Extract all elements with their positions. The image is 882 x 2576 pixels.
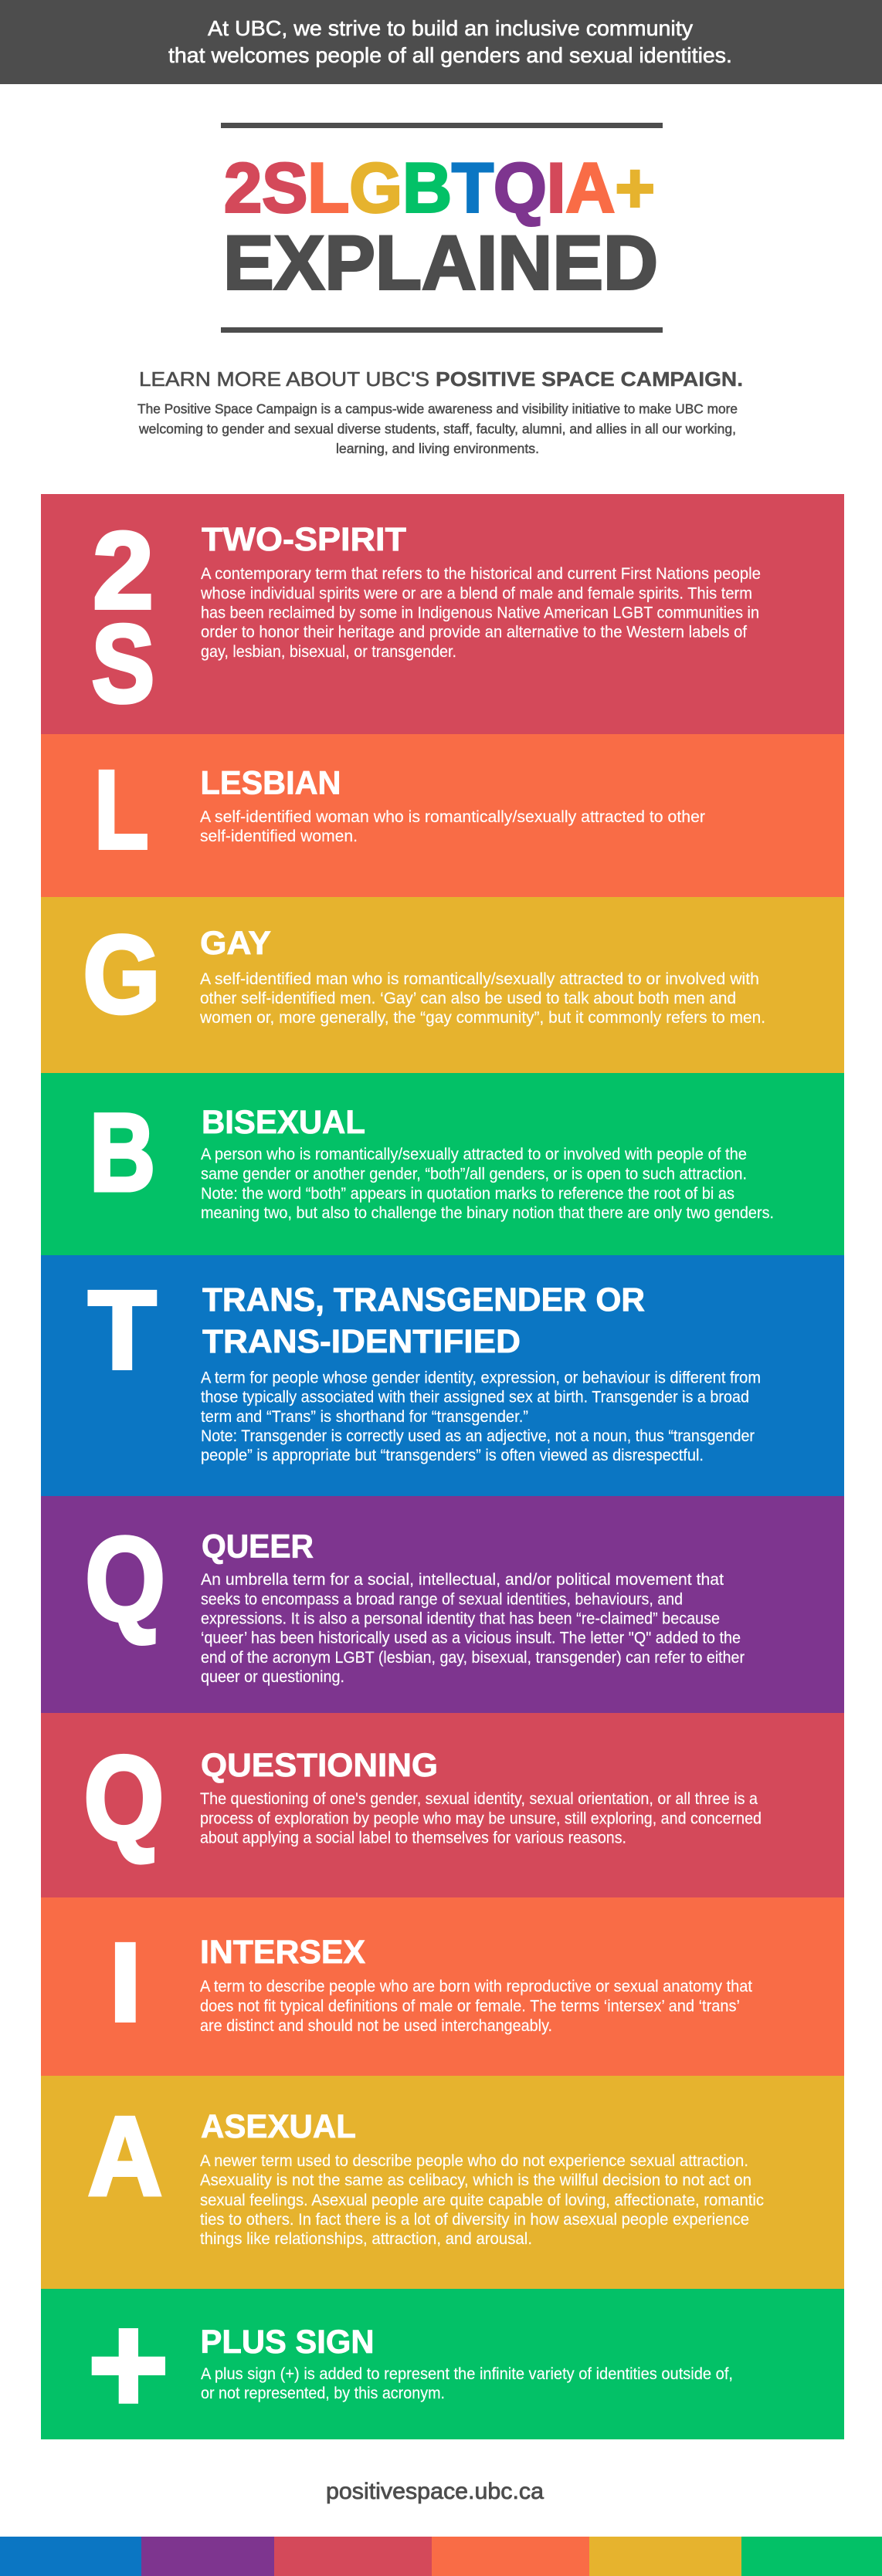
panel: bisexual: BISEXUAL — [202, 1104, 365, 1141]
intro heading: LEARN MORE ABOUT UBC'S — [139, 367, 429, 391]
panel: questioning: The questioning of one's gender, sexual identity, sexual orientation, or all three is a — [200, 1790, 758, 1808]
title block: EXPLAINED — [223, 219, 658, 306]
panel: intersex: INTERSEX — [200, 1934, 365, 1971]
panel: gay: A self-identified man who is romantically/sexually attracted to or involved with — [200, 970, 759, 988]
panel: bisexual — [41, 1073, 844, 1255]
panel: plus sign: or not represented, by this acronym. — [201, 2385, 445, 2402]
panel: transgender: Note: Transgender is correctly used as an adjective, not a noun, thus “transgender — [201, 1427, 755, 1445]
panel: queer: seeks to encompass a broad range of sexual identities, behaviours, and — [201, 1590, 683, 1608]
panel: plus sign: PLUS SIGN — [201, 2324, 374, 2361]
panel: two-spirit: A contemporary term that refers to the historical and current First Nations people — [201, 565, 761, 583]
panel: plus sign — [41, 2289, 844, 2439]
panel: questioning — [41, 1713, 844, 1897]
panel: two-spirit: order to honor their heritage and provide an alternative to the Western labels of — [201, 624, 747, 641]
title block: 2SLGBTQIA+ — [224, 150, 655, 227]
panel: asexual: sexual feelings. Asexual people are quite capable of loving, affectionate, romantic — [200, 2192, 764, 2209]
panel: asexual: things like relationships, attraction, and arousal. — [200, 2230, 532, 2248]
panel: intersex — [41, 1897, 844, 2076]
panel: two-spirit: whose individual spirits were or are a blend of male and female spirits. This term — [200, 584, 752, 602]
panel: two-spirit — [41, 494, 844, 734]
panel: queer: queer or questioning. — [201, 1668, 344, 1686]
top banner: At UBC, we strive to build an inclusive community — [208, 16, 693, 40]
panel: intersex: A term to describe people who are born with reproductive or sexual anatomy that — [200, 1978, 752, 1995]
panel: asexual: A — [88, 2094, 162, 2219]
panel: bisexual: same gender or another gender, “both”/all genders, or is open to such attraction. — [201, 1166, 747, 1183]
panel: transgender: those typically associated with their assigned sex at birth. Transgender is a broad — [201, 1389, 749, 1406]
panel: bisexual: Note: the word “both” appears in quotation marks to reference the root of bi as — [201, 1185, 734, 1203]
panel: two-spirit: TWO-SPIRIT — [202, 521, 406, 558]
intro paragraph: learning, and living environments. — [336, 441, 539, 456]
footer url: positivespace.ubc.ca — [326, 2479, 544, 2504]
panel: two-spirit: 2 — [93, 509, 154, 631]
panel: transgender: T — [88, 1268, 156, 1393]
panel: queer: Q — [85, 1512, 165, 1646]
panel: asexual — [41, 2076, 844, 2289]
panel: transgender: TRANS-IDENTIFIED — [202, 1323, 521, 1360]
title block — [221, 123, 663, 333]
panel: queer — [41, 1496, 844, 1713]
panel: queer: An umbrella term for a social, intellectual, and/or political movement that — [201, 1571, 724, 1589]
panel: gay: G — [83, 914, 161, 1036]
panel: two-spirit: S — [92, 603, 154, 726]
panel: lesbian: A self-identified woman who is romantically/sexually attracted to other — [200, 808, 705, 826]
panel: two-spirit: has been reclaimed by some in Indigenous Native American LGBT communities in — [201, 604, 759, 622]
panel: lesbian: L — [94, 747, 148, 872]
panel: transgender: people” is appropriate but “transgenders” is often viewed as disrespectful. — [201, 1447, 704, 1464]
panel: lesbian: LESBIAN — [201, 764, 341, 801]
intro paragraph — [137, 401, 738, 456]
panel: queer: ‘queer’ has been historically used as a vicious insult. The letter "Q" added to the — [201, 1630, 741, 1647]
panel: bisexual: A person who is romantically/sexually attracted to or involved with people of the — [201, 1146, 747, 1163]
top banner — [0, 0, 882, 84]
panel: gay: other self-identified men. ‘Gay’ can also be used to talk about both men and — [200, 990, 736, 1007]
panel: transgender: term and “Trans” is shorthand for “transgender.” — [201, 1408, 528, 1426]
icon: plus — [92, 2328, 165, 2404]
panel: lesbian — [41, 734, 844, 897]
panel: asexual: Asexuality is not the same as celibacy, which is the willful decision to not act on — [200, 2171, 751, 2189]
panel: questioning: about applying a social label to themselves for various reasons. — [200, 1829, 626, 1847]
panel: gay — [41, 897, 844, 1073]
panel: transgender: A term for people whose gender identity, expression, or behaviour is different from — [201, 1369, 761, 1386]
panel: asexual: ASEXUAL — [201, 2108, 356, 2145]
intro paragraph: welcoming to gender and sexual diverse students, staff, faculty, alumni, and allies in all our working, — [138, 421, 736, 437]
panel: transgender — [41, 1255, 844, 1496]
panel: queer: QUEER — [202, 1528, 314, 1566]
panel: gay: women or, more generally, the “gay community”, but it commonly refers to men. — [199, 1009, 765, 1027]
panel: bisexual: B — [90, 1092, 155, 1214]
panel: lesbian: self-identified women. — [200, 828, 358, 845]
panel: questioning: QUESTIONING — [201, 1747, 438, 1784]
rainbow footer strip — [0, 2537, 882, 2576]
panel: transgender: TRANS, TRANSGENDER OR — [202, 1281, 645, 1318]
panel: intersex: I — [110, 1921, 141, 2044]
panel: two-spirit: gay, lesbian, bisexual, or transgender. — [201, 643, 456, 661]
panel: asexual: ties to others. In fact there is a lot of diversity in how asexual people experience — [200, 2211, 749, 2229]
top banner: that welcomes people of all genders and sexual identities. — [168, 43, 732, 67]
panel: intersex: does not fit typical definitions of male or female. The terms ‘intersex’ and ‘trans’ — [200, 1998, 740, 2015]
panel: gay: GAY — [200, 925, 271, 962]
panel: questioning: Q — [83, 1731, 164, 1865]
intro heading: POSITIVE SPACE CAMPAIGN. — [436, 367, 743, 391]
panel: queer: expressions. It is also a personal identity that has been “re-claimed” because — [201, 1610, 720, 1627]
panel: questioning: process of exploration by people who may be unsure, still exploring, and concerned — [200, 1809, 762, 1827]
panel: queer: end of the acronym LGBT (lesbian, gay, bisexual, transgender) can refer to either — [201, 1649, 745, 1667]
intro heading — [139, 367, 743, 391]
panel: asexual: A newer term used to describe people who do not experience sexual attraction. — [200, 2152, 748, 2170]
panel: plus sign: A plus sign (+) is added to represent the infinite variety of identities outside of, — [201, 2365, 733, 2383]
panel: intersex: are distinct and should not be used interchangeably. — [200, 2017, 552, 2035]
intro paragraph: The Positive Space Campaign is a campus-wide awareness and visibility initiative to make UBC more — [137, 401, 738, 417]
panel: bisexual: meaning two, but also to challenge the binary notion that there are only two genders. — [201, 1204, 774, 1222]
